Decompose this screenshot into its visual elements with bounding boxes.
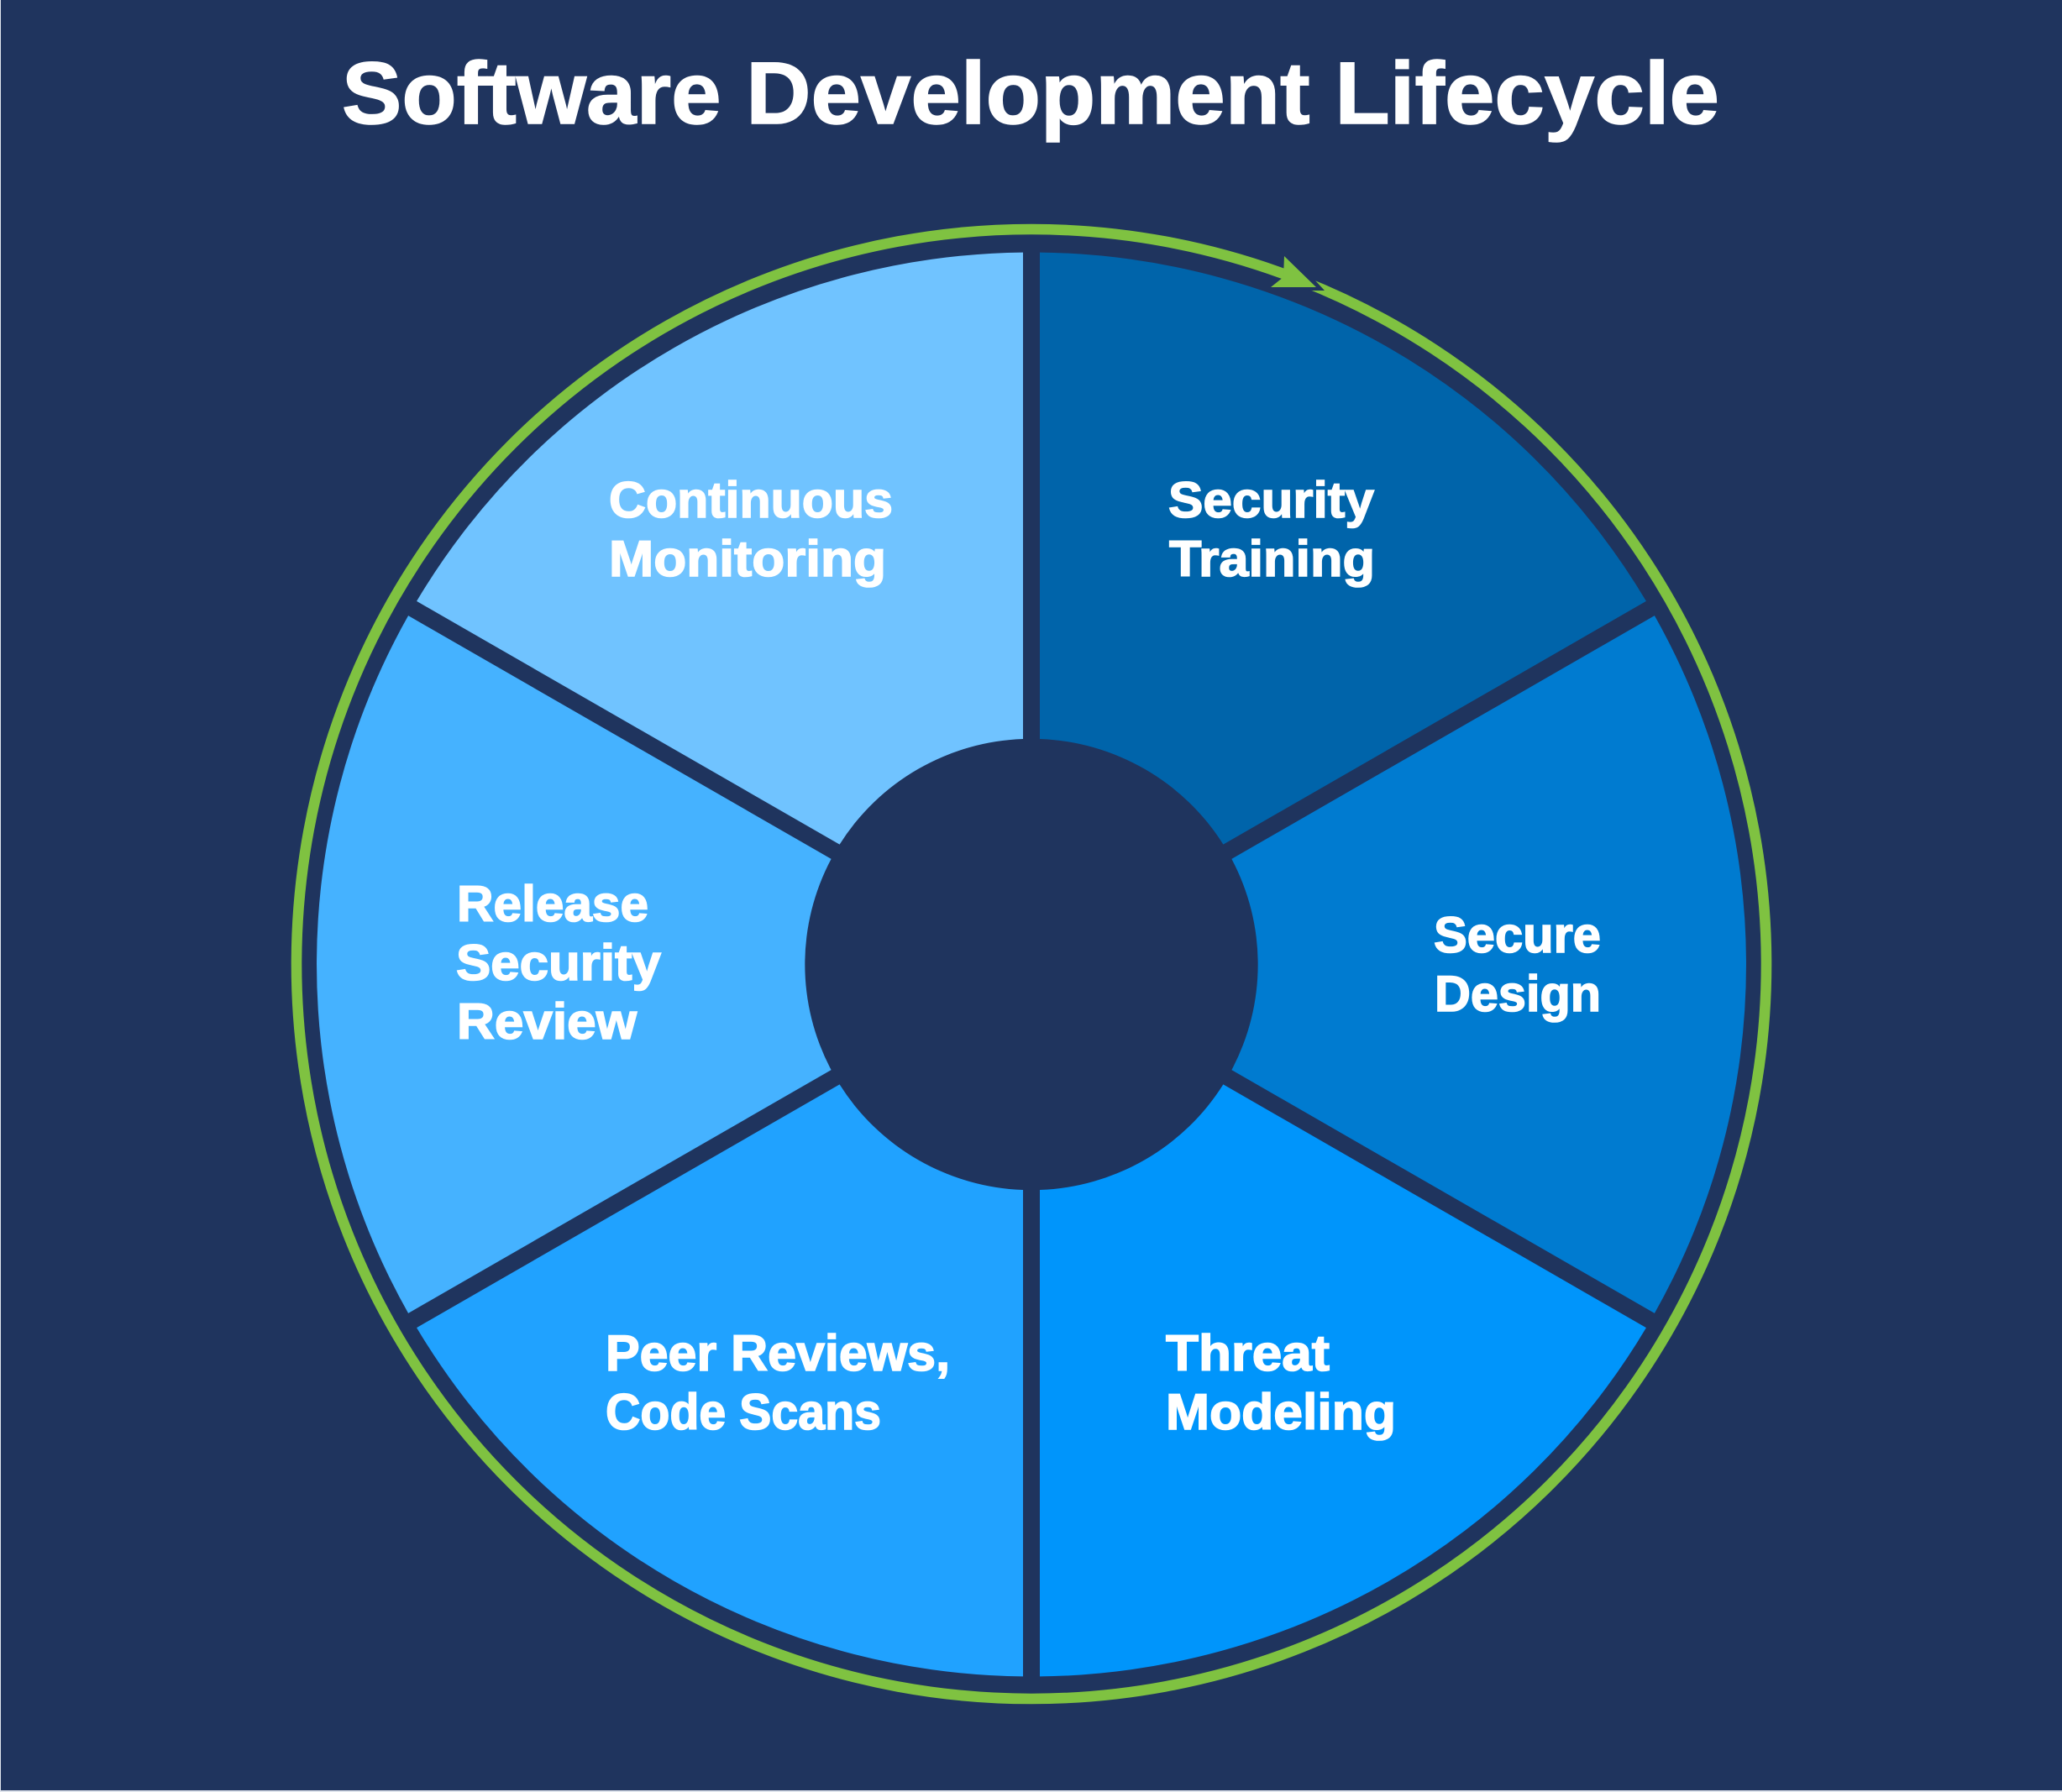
label: Release Security Review — [456, 876, 662, 1050]
icon: clockwise arrowhead — [1271, 256, 1316, 287]
label: Peer Reviews, Code Scans: Peer Reviews, — [606, 1325, 950, 1381]
label: Security Training: Security — [1168, 472, 1375, 528]
segment: Peer Reviews, Code Scans — [417, 1084, 1023, 1676]
segment: Threat Modeling — [828, 1032, 1646, 1792]
label: Threat Modeling — [1166, 1325, 1396, 1440]
green cycle ring — [296, 229, 1766, 1699]
label: Secure Design: Secure — [1434, 907, 1601, 963]
title: Software Development Lifecycle — [342, 45, 1719, 143]
ring gap before arrowhead — [1293, 265, 1325, 291]
segment: Security Training — [1040, 253, 1646, 845]
label: Peer Reviews, Code Scans — [606, 1325, 950, 1440]
label: Continuous Monitoring: Continuous — [609, 472, 893, 528]
label: Security Training — [1168, 472, 1375, 587]
label: Peer Reviews, Code Scans: Code Scans — [606, 1384, 881, 1440]
label: Release Security Review: Review — [457, 993, 637, 1050]
segment: Release Security Review — [105, 494, 923, 1313]
label: Security Training: Training — [1169, 531, 1375, 587]
label: Release Security Review: Release — [457, 876, 648, 932]
label: Secure Design: Design — [1435, 966, 1601, 1022]
label: Continuous Monitoring: Monitoring — [609, 531, 886, 587]
label: Threat Modeling: Threat — [1166, 1325, 1330, 1381]
label: Threat Modeling: Modeling — [1166, 1384, 1396, 1440]
label: Release Security Review: Security — [456, 935, 662, 991]
segment: Secure Design — [1140, 616, 1958, 1435]
segment: Continuous Monitoring — [417, 78, 1235, 897]
label: Secure Design — [1434, 907, 1601, 1022]
label: Continuous Monitoring — [609, 472, 893, 587]
